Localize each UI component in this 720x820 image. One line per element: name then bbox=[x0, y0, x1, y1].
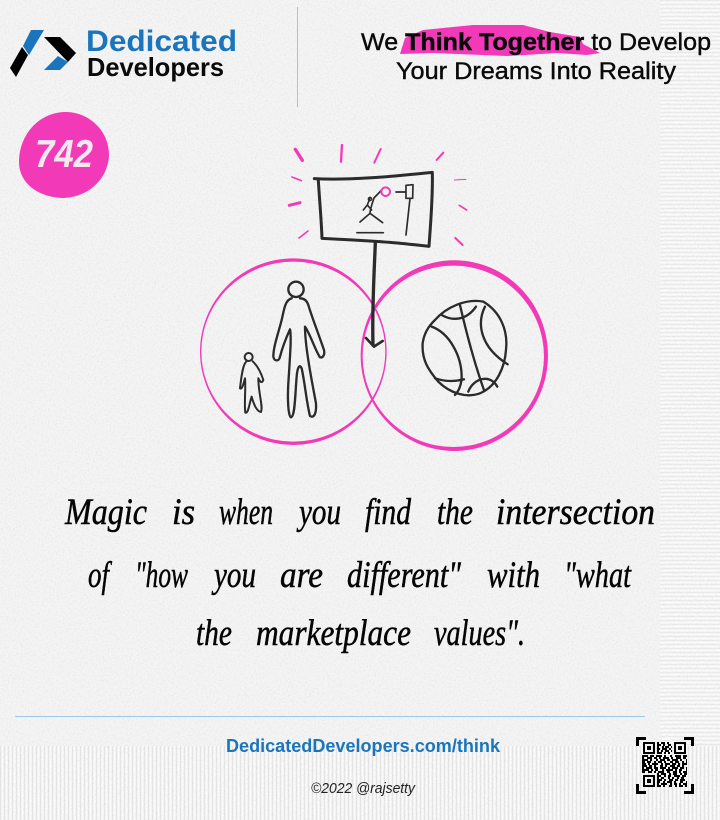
logo: Dedicated Developers bbox=[10, 25, 237, 82]
right circle bbox=[361, 260, 548, 451]
quote line 3: the bbox=[196, 613, 232, 654]
tagline with brush highlight bbox=[361, 25, 711, 85]
QR corner brackets bbox=[638, 738, 692, 792]
hoop stand bbox=[396, 185, 413, 235]
footer link: DedicatedDevelopers.com/think bbox=[226, 736, 501, 756]
logo wordmark top: Dedicated bbox=[86, 25, 237, 58]
QR finder squares bbox=[644, 743, 685, 786]
quote line 2 bbox=[88, 555, 632, 596]
header divider bbox=[296, 7, 298, 107]
quote line 1: intersection bbox=[496, 492, 655, 533]
quote line 2: with bbox=[487, 555, 540, 596]
quote line 1: Magic bbox=[64, 492, 147, 533]
quote line 1 bbox=[64, 492, 655, 533]
quote line 3: values". bbox=[434, 613, 525, 654]
quote line 3: marketplace bbox=[256, 613, 411, 654]
quote line 2: different" bbox=[347, 555, 461, 596]
left circle bbox=[200, 258, 387, 445]
arrow pole and head bbox=[373, 243, 375, 345]
sign board with player and hoop bbox=[314, 172, 432, 347]
ball in player's hand bbox=[381, 187, 390, 196]
badge number: 742 bbox=[35, 133, 93, 176]
quote text bbox=[64, 492, 655, 654]
badge: number 742 bbox=[19, 112, 109, 198]
quote line 1: the bbox=[437, 492, 473, 533]
adult figure bbox=[273, 282, 324, 417]
quote line 2: of bbox=[88, 555, 112, 596]
brush highlight bbox=[400, 25, 600, 56]
quote line 1: find bbox=[365, 492, 411, 533]
icon: logo mark bbox=[10, 30, 76, 77]
logo wordmark bottom: Developers bbox=[87, 52, 224, 82]
QR modules bbox=[642, 743, 687, 786]
copyright: ©2022 @rajsetty bbox=[311, 780, 416, 797]
quote line 1: is bbox=[172, 492, 195, 533]
QR code bbox=[638, 738, 692, 792]
tagline line 1: We Think Together to Develop bbox=[361, 29, 711, 56]
quote line 2: "how bbox=[135, 555, 188, 596]
quote line 1: you bbox=[296, 492, 341, 533]
quote line 2: you bbox=[211, 555, 256, 596]
footer divider bbox=[15, 716, 645, 718]
quote line 3 bbox=[196, 613, 525, 654]
tagline line 2: Your Dreams Into Reality bbox=[396, 58, 676, 85]
rays around the sign bbox=[289, 145, 467, 245]
illustration: sign pointing into the intersection of two circles bbox=[200, 145, 548, 451]
quote line 2: "what bbox=[564, 555, 632, 596]
quote line 2: are bbox=[280, 555, 323, 596]
quote line 1: when bbox=[219, 492, 273, 533]
player bbox=[360, 189, 383, 223]
basketball bbox=[423, 301, 508, 395]
child figure bbox=[240, 353, 263, 413]
